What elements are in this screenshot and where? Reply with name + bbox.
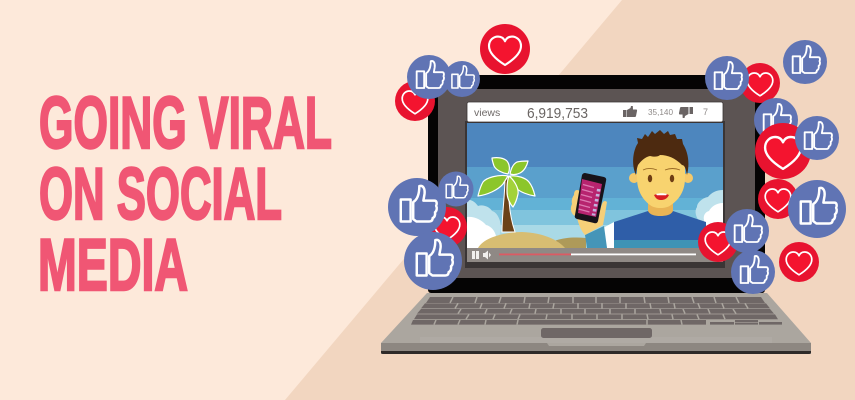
icon: thumb lower right — [731, 250, 775, 294]
clouds — [467, 190, 723, 248]
icon: thumb small left — [438, 172, 474, 206]
icon: thumb behind big heart — [754, 98, 798, 142]
video stats bar: 6,919,753 — [527, 105, 588, 122]
hand holding phone — [571, 173, 607, 248]
islands — [478, 232, 586, 248]
icon: heart right top — [740, 63, 780, 103]
video controls — [467, 248, 723, 262]
icon: thumb up — [623, 106, 637, 117]
laptop base — [381, 293, 811, 354]
icon: thumb small — [444, 61, 480, 97]
title: MEDIA — [38, 223, 188, 306]
icon: thumb bottom left — [404, 232, 462, 290]
man — [614, 130, 706, 248]
palm tree — [478, 158, 535, 232]
title — [38, 81, 332, 306]
video screen — [467, 123, 723, 248]
icon: thumb right top — [705, 56, 749, 100]
icon: thumb big right — [788, 180, 846, 238]
video stats bar: 7 — [703, 107, 708, 117]
reaction icons — [388, 24, 846, 294]
icon: heart lower right — [779, 242, 819, 282]
icon: pause — [472, 251, 479, 259]
icon: heart lower left — [427, 207, 467, 247]
trackpad — [541, 328, 652, 338]
icon: speaker — [483, 250, 491, 260]
icon: heart top — [480, 24, 530, 74]
icon: heart right middle — [758, 179, 798, 219]
title: GOING VIRAL — [39, 81, 332, 164]
keyboard — [411, 297, 782, 325]
video stats bar: views — [474, 107, 500, 119]
icon: thumb — [407, 55, 451, 99]
icon: heart on screen — [698, 222, 738, 262]
icon: thumb down — [679, 107, 693, 118]
icon: thumb far right — [783, 40, 827, 84]
video stats bar: 35,140 — [648, 107, 673, 117]
video stats bar — [467, 102, 723, 122]
title: ON SOCIAL — [39, 152, 282, 235]
laptop — [381, 75, 811, 354]
laptop lid — [428, 75, 765, 293]
icon: big heart — [755, 123, 811, 179]
icon: thumb right — [795, 116, 839, 160]
icon: thumb big left — [388, 178, 446, 236]
icon: thumb screen corner — [725, 209, 769, 253]
progress bar — [499, 254, 696, 255]
icon: heart left — [395, 81, 435, 121]
